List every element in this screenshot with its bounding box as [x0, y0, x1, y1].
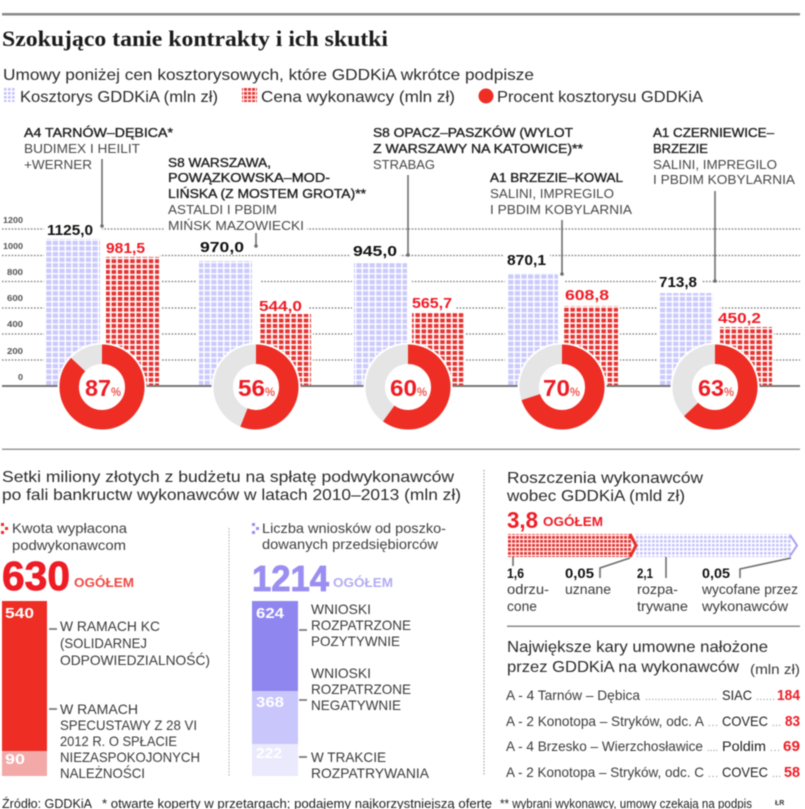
contract 3: S8 Opacz–Paszków: S8 OPACZ–PASZKÓW (WYLOT [373, 125, 573, 140]
panel: largest contractual penalties: ... [770, 743, 780, 754]
panel: contractor claims: 0,05 [702, 565, 730, 581]
chart: grid and axis: 800 [7, 268, 24, 277]
panel: largest contractual penalties: A - 4 Brzesko – Wierzchosławice [506, 738, 703, 754]
legend: Cena wykonawcy (mln zł) [261, 89, 455, 106]
contract 3: S8 Opacz–Paszków: STRABAG [373, 157, 435, 172]
panel: contractor claims: 2,1 [637, 565, 653, 581]
panel: largest contractual penalties: SIAC [722, 687, 752, 703]
panel: number of applications: ROZPATRYWANIA [311, 765, 430, 781]
contract 3: S8 Opacz–Paszków: 565,7 [412, 296, 452, 312]
contract 1: A4 Tarnów–Dębica: 981,5 [106, 241, 145, 257]
panel heading: payments to subcontractors [2, 469, 461, 504]
panel: amount paid to subcontractors: Kwota wypłacona [12, 520, 127, 536]
contract 1: A4 Tarnów–Dębica: 87 [85, 375, 111, 401]
footnotes [2, 796, 784, 809]
contract 2: S8 Warszawa, Powązkowska–Modlińska: S8 WARSZAWA, [168, 155, 271, 170]
panel: number of applications: ROZPATRZONE [311, 617, 411, 633]
chart: grid and axis: 400 [7, 320, 24, 329]
panel: number of applications: NEGATYWNIE [311, 697, 401, 713]
contract 5: A1 Czerniewice–Brzezie: I PBDIM KOBYLARNIA [653, 172, 795, 187]
contract 4: A1 Brzezie–Kowal: 870,1 [507, 253, 546, 269]
subtitle: Umowy poniżej cen kosztorysowych, które GDDKiA wkrótce podpisze [3, 67, 534, 84]
panel: largest contractual penalties: .... [707, 743, 718, 754]
panel: largest contractual penalties: ... [708, 769, 718, 780]
panel: number of applications: ROZPATRZONE [311, 681, 411, 697]
contract 4: A1 Brzezie–Kowal: 608,8 [565, 288, 609, 304]
panel: largest contractual penalties: Największe kary umowne nałożone [507, 639, 768, 656]
legend [3, 88, 703, 106]
panel: largest contractual penalties: ... [708, 718, 718, 729]
panel: contractor claims: cone [507, 598, 537, 614]
contract 5: A1 Czerniewice–Brzezie: 713,8 [659, 275, 697, 291]
contract 4: A1 Brzezie–Kowal [490, 170, 632, 432]
contract 2: S8 Warszawa, Powązkowska–Modlińska: % [265, 385, 275, 399]
panel: amount paid to subcontractors: W RAMACH KC [60, 618, 160, 634]
panel: largest contractual penalties: ... [772, 769, 781, 780]
panel: largest contractual penalties: 83 [785, 714, 800, 730]
panel: number of applications: 222 [256, 746, 282, 762]
panel: number of applications: 368 [256, 695, 284, 711]
panel: contractor claims: 3,8 [507, 507, 538, 533]
contract 2: S8 Warszawa, Powązkowska–Modlińska: LIŃSKA (Z MOSTEM GROTA)** [168, 186, 366, 201]
panel: contractor claims: trywane [637, 598, 688, 614]
chart: grid and axis: 1000 [3, 242, 24, 251]
title: Szokująco tanie kontrakty i ich skutki [2, 26, 388, 51]
panel: number of applications [252, 520, 446, 781]
contract 3: S8 Opacz–Paszków: 60 [390, 375, 417, 401]
legend: Procent kosztorysu GDDKiA [497, 89, 703, 106]
contract 5: A1 Czerniewice–Brzezie: 63 [698, 375, 724, 401]
panel: contractor claims: 0,05 [565, 565, 594, 581]
contract 1: A4 Tarnów–Dębica: A4 TARNÓW–DĘBICA* [24, 125, 173, 140]
contract 1: A4 Tarnów–Dębica: +WERNER [24, 157, 92, 172]
contract 4: A1 Brzezie–Kowal: 70 [543, 375, 570, 401]
panel: amount paid to subcontractors: OGÓŁEM [74, 575, 134, 590]
contract 4: A1 Brzezie–Kowal: I PBDIM KOBYLARNIA [490, 202, 632, 217]
contract 1: A4 Tarnów–Dębica: 1125,0 [47, 223, 93, 239]
panel: contractor claims: wycofane przez [701, 581, 798, 597]
chart: grid and axis: 600 [7, 294, 24, 303]
panel: amount paid to subcontractors: NALEŻNOŚCI [60, 764, 145, 781]
panel: number of applications: OGÓŁEM [333, 575, 393, 590]
contract 5: A1 Czerniewice–Brzezie: A1 CZERNIEWICE– [653, 125, 775, 140]
panel: largest contractual penalties: ...... [756, 692, 775, 703]
chart: grid and axis: 0 [18, 373, 24, 382]
panel: number of applications: POZYTYWNIE [311, 633, 400, 649]
contract 2: S8 Warszawa, Powązkowska–Modlińska: 970,0 [200, 240, 244, 256]
panel: amount paid to subcontractors: (SOLIDARNEJ [60, 635, 147, 651]
panel: largest contractual penalties: (mln zł) [750, 662, 800, 677]
panel heading: payments to subcontractors: Setki miliony złotych z budżetu na spłatę podwykonawców [2, 469, 454, 486]
panel: amount paid to subcontractors: SPECUSTAWY Z 28 VI [60, 717, 197, 733]
panel: contractor claims: wykonawców [701, 598, 789, 614]
panel: amount paid to subcontractors: podwykonawcom [12, 537, 126, 553]
panel: amount paid to subcontractors: 540 [5, 606, 34, 622]
contract 4: A1 Brzezie–Kowal: % [570, 385, 580, 399]
panel: number of applications: 624 [256, 606, 284, 622]
legend: Kosztorys GDDKiA (mln zł) [20, 89, 218, 106]
contract 1: A4 Tarnów–Dębica [24, 125, 173, 432]
contract 1: A4 Tarnów–Dębica: BUDIMEX I HEILIT [24, 141, 140, 156]
panel: contractor claims: wobec GDDKiA (mld zł) [506, 488, 685, 505]
panel: largest contractual penalties: ....................... [645, 692, 717, 703]
contract 2: S8 Warszawa, Powązkowska–Modlińska: MIŃSK MAZOWIECKI [168, 218, 304, 233]
panel: number of applications: WNIOSKI [311, 601, 371, 617]
panel: number of applications: WNIOSKI [311, 665, 371, 681]
panel: contractor claims: Roszczenia wykonawców [507, 470, 703, 487]
contract 2: S8 Warszawa, Powązkowska–Modlińska [165, 155, 366, 432]
panel: contractor claims [506, 470, 798, 614]
panel: largest contractual penalties [506, 639, 800, 781]
contract 3: S8 Opacz–Paszków: 945,0 [353, 244, 397, 260]
chart: grid and axis: 1200 [3, 216, 24, 225]
contract 2: S8 Warszawa, Powązkowska–Modlińska: 544,0 [259, 299, 302, 315]
contract 5: A1 Czerniewice–Brzezie: SALINI, IMPREGILO [653, 157, 777, 172]
contract 2: S8 Warszawa, Powązkowska–Modlińska: ASTALDI I PBDIM [168, 202, 277, 217]
contract 2: S8 Warszawa, Powązkowska–Modlińska: POWĄZKOWSKA–MOD- [168, 170, 330, 185]
contract 5: A1 Czerniewice–Brzezie: BRZEZIE [653, 141, 708, 156]
panel: largest contractual penalties: przez GDDKiA na wykonawców [507, 659, 739, 676]
footnotes: ŁR [775, 800, 784, 807]
panel: amount paid to subcontractors: 90 [5, 752, 25, 768]
panel: amount paid to subcontractors: 2012 R. O SPŁACIE [60, 733, 177, 749]
panel: amount paid to subcontractors: W RAMACH [60, 701, 138, 717]
contract 5: A1 Czerniewice–Brzezie: % [724, 385, 734, 399]
panel: contractor claims: uznane [565, 581, 611, 597]
panel: contractor claims: rozpa- [637, 581, 678, 597]
panel: largest contractual penalties: 184 [777, 688, 800, 704]
panel: amount paid to subcontractors: 630 [2, 553, 70, 599]
contract 3: S8 Opacz–Paszków [350, 125, 583, 432]
contract 5: A1 Czerniewice–Brzezie [653, 125, 795, 432]
panel: largest contractual penalties: A - 4 Tarnów – Dębica [506, 687, 640, 703]
panel heading: payments to subcontractors: po fali bankructw wykonawców w latach 2010–2013 (mln zł) [2, 487, 461, 504]
contract 2: S8 Warszawa, Powązkowska–Modlińska: 56 [238, 375, 265, 401]
panel: amount paid to subcontractors: ODPOWIEDZIALNOŚĆ) [60, 651, 210, 668]
panel: largest contractual penalties: A - 2 Konotopa – Stryków, odc. C [506, 764, 704, 780]
contract 4: A1 Brzezie–Kowal: A1 BRZEZIE–KOWAL [490, 170, 623, 185]
panel: largest contractual penalties: COVEC [722, 713, 768, 729]
panel: number of applications: W TRAKCIE [311, 749, 386, 765]
panel: largest contractual penalties: ... [772, 718, 781, 729]
chart: grid and axis: 200 [7, 347, 24, 356]
panel: largest contractual penalties: A - 2 Konotopa – Stryków, odc. A [506, 713, 705, 729]
panel: contractor claims: odrzu- [507, 581, 549, 597]
panel: largest contractual penalties: 69 [783, 739, 800, 755]
panel: number of applications: dowanych przedsiębiorców [262, 536, 439, 552]
contract 4: A1 Brzezie–Kowal: SALINI, IMPREGILO [490, 186, 614, 201]
panel: amount paid to subcontractors [1, 520, 210, 781]
panel: amount paid to subcontractors: NIEZASPOKOJONYCH [60, 749, 200, 765]
panel: number of applications: 1214 [252, 558, 329, 599]
panel: contractor claims: 1,6 [507, 565, 524, 581]
contract 5: A1 Czerniewice–Brzezie: 450,2 [718, 311, 761, 327]
contract 3: S8 Opacz–Paszków: % [417, 385, 427, 399]
contract 1: A4 Tarnów–Dębica: % [111, 385, 121, 399]
panel: largest contractual penalties: COVEC [722, 764, 768, 780]
panel: largest contractual penalties: Poldim [722, 738, 766, 754]
contract 3: S8 Opacz–Paszków: Z WARSZAWY NA KATOWICE)** [373, 141, 583, 156]
panel: largest contractual penalties: 58 [784, 765, 800, 781]
panel: contractor claims: OGÓŁEM [543, 514, 603, 529]
panel: number of applications: Liczba wniosków od poszko- [262, 520, 446, 536]
chart: grid and axis [2, 216, 800, 387]
